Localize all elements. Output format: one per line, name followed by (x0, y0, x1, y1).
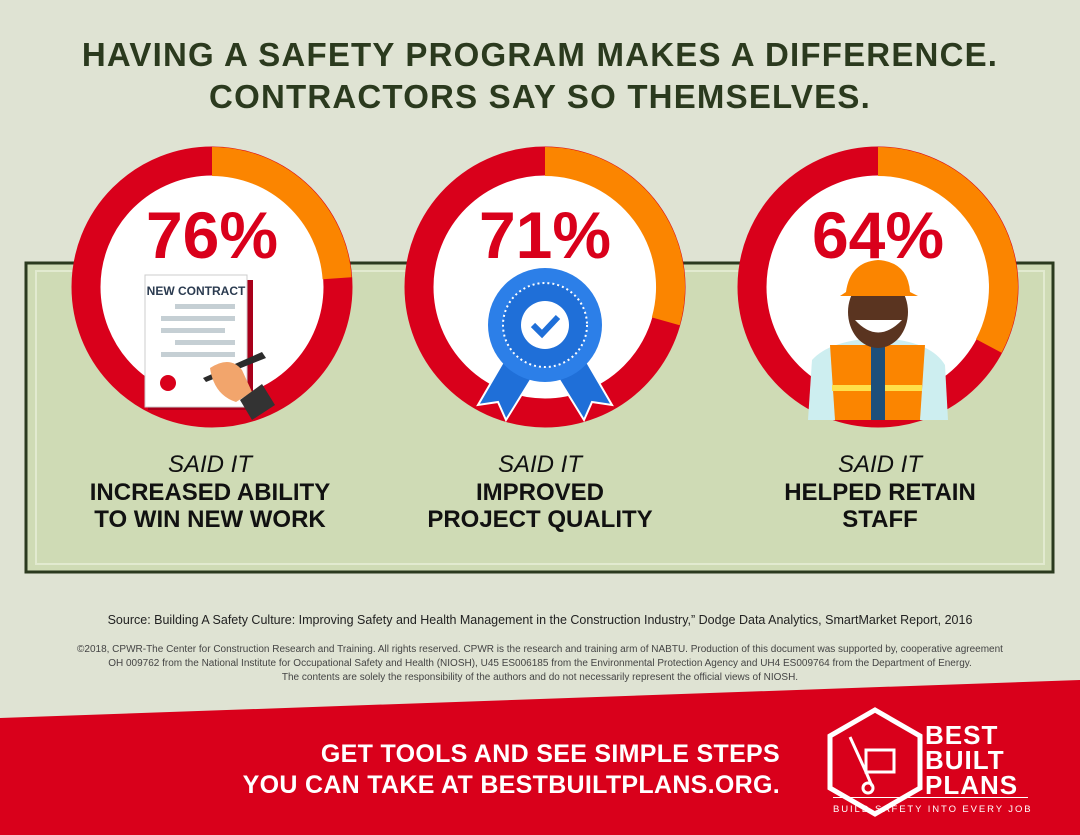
source text: Source: Building A Safety Culture: Improving Safety and Health Management in the Construction Industry,” Dodge Data Analytics, SmartMarket Report, 2016 (108, 613, 972, 627)
caption 1 (90, 451, 330, 533)
caption 3: SAID IT (838, 451, 924, 478)
caption 2: SAID IT (498, 451, 584, 478)
icon: contract: NEW CONTRACT (147, 284, 246, 298)
logo: Best Built Plans: BUILT (925, 745, 1005, 775)
caption 2: IMPROVED (476, 479, 604, 506)
panel: green stats band (26, 263, 1053, 572)
logo: Best Built Plans: BEST (925, 720, 998, 750)
call to action (243, 740, 780, 799)
call to action: YOU CAN TAKE AT BESTBUILTPLANS.ORG. (243, 771, 780, 799)
call to action: GET TOOLS AND SEE SIMPLE STEPS (321, 740, 780, 768)
footer red band (0, 680, 1080, 835)
donut 2: 71% (419, 147, 685, 420)
copyright text: ©2018, CPWR-The Center for Construction Research and Training. All rights reserved. CPWR is the research and training arm of NABTU. Production of this document was supported by, cooperative agreement (77, 644, 1003, 655)
caption 2 (427, 451, 653, 533)
caption 1: SAID IT (168, 451, 254, 478)
caption 3 (784, 451, 976, 533)
donut 1: 76%: 76% (146, 198, 278, 272)
caption 3: HELPED RETAIN (784, 479, 976, 506)
donut 3: 64%: 64% (812, 198, 944, 272)
icon: contract (145, 275, 275, 420)
copyright text: OH 009762 from the National Institute for Occupational Safety and Health (NIOSH), U45 ES006185 from the Environmental Protection Agency and UH4 ES009764 from the Department of Energy. (108, 658, 972, 669)
donut 2: 71%: 71% (479, 198, 611, 272)
caption 1: INCREASED ABILITY (90, 479, 330, 506)
donut 3: 64% (752, 147, 1018, 420)
copyright text (77, 644, 1003, 683)
caption 3: STAFF (842, 506, 918, 533)
icon: blue ribbon badge (478, 268, 612, 420)
donut 1: 76% (86, 147, 352, 420)
caption 1: TO WIN NEW WORK (94, 506, 326, 533)
logo: Best Built Plans: PLANS (925, 770, 1018, 800)
logo: Best Built Plans (830, 710, 1032, 815)
caption 2: PROJECT QUALITY (427, 506, 653, 533)
icon: construction worker (808, 260, 948, 420)
logo: Best Built Plans: BUILD SAFETY INTO EVERY JOB (833, 804, 1032, 815)
title (82, 36, 998, 115)
title: HAVING A SAFETY PROGRAM MAKES A DIFFERENCE. (82, 36, 998, 73)
copyright text: The contents are solely the responsibility of the authors and do not necessarily represent the official views of NIOSH. (282, 672, 798, 683)
title: CONTRACTORS SAY SO THEMSELVES. (209, 78, 871, 115)
